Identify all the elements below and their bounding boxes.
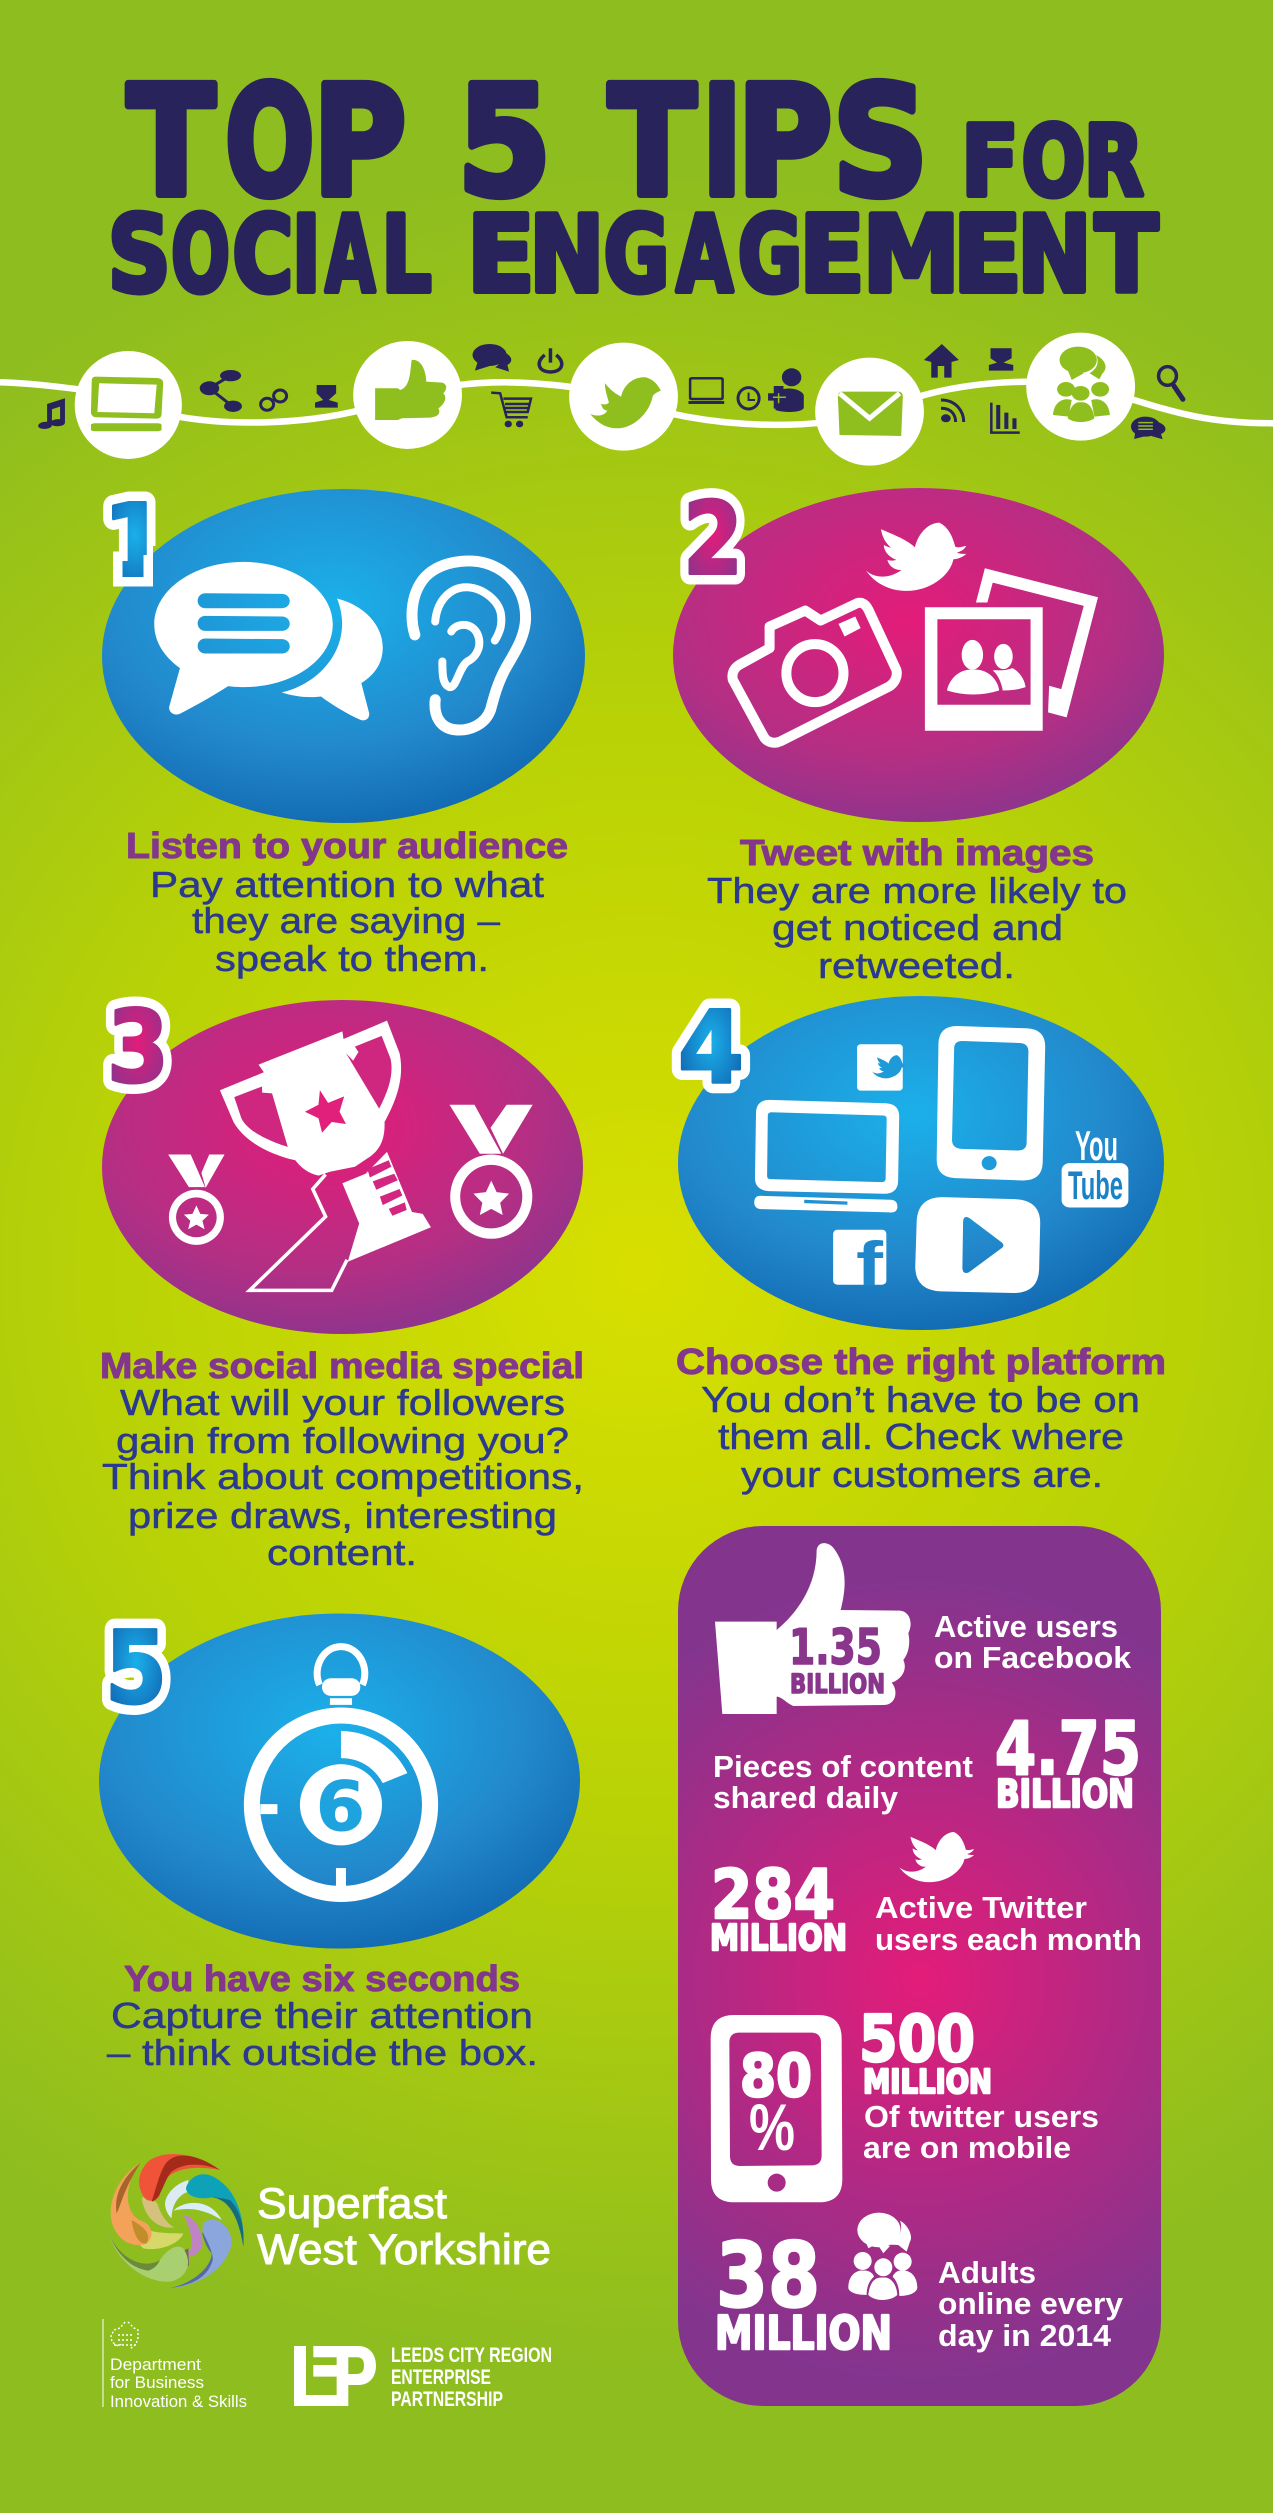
blue oval bbox=[678, 996, 1164, 1330]
title line two: M bbox=[862, 193, 960, 316]
panel: tip 1 bbox=[102, 482, 585, 979]
heading: You have six seconds bbox=[124, 1958, 520, 1999]
label: content shared: Pieces of content bbox=[713, 1749, 973, 1784]
title word: for: O bbox=[1022, 105, 1085, 218]
department name: Department bbox=[110, 2355, 201, 2374]
number 5: 5 bbox=[105, 1610, 167, 1726]
icon: rss bbox=[941, 400, 964, 422]
icon: mini laptop bbox=[688, 378, 724, 404]
title word: for: F bbox=[961, 105, 1019, 218]
body text bbox=[150, 864, 544, 979]
number 2: 2 bbox=[683, 480, 743, 598]
label: adults online: day in 2014 bbox=[938, 2318, 1112, 2353]
icon band with wavy line bbox=[0, 333, 1273, 466]
icon: bird circle bbox=[569, 343, 678, 451]
body text bbox=[701, 1379, 1140, 1495]
stat: 284 million: 284 bbox=[711, 1856, 835, 1935]
panel background bbox=[678, 1526, 1161, 2406]
stat: 4.75 billion bbox=[995, 1707, 1141, 1816]
stat: 38 million: 38 bbox=[716, 2223, 820, 2327]
body text: them all. Check where bbox=[718, 1416, 1124, 1457]
icon: play button bbox=[915, 1197, 1040, 1293]
title line two: N bbox=[529, 193, 604, 316]
label: adults online bbox=[938, 2255, 1124, 2353]
icon: trophy bbox=[220, 1021, 431, 1290]
icon: tablet bbox=[937, 1026, 1045, 1180]
stat: 38 million: MILLION bbox=[715, 2306, 892, 2360]
stat: 500 million: 500 bbox=[859, 2003, 975, 2077]
stat: 80 percent: 80 bbox=[740, 2041, 812, 2110]
wordmark: West Yorkshire bbox=[257, 2226, 551, 2274]
body text bbox=[102, 1382, 584, 1573]
title line one: O bbox=[225, 54, 314, 230]
icon: people circle bbox=[1026, 333, 1135, 441]
stat: 1.35 billion: 1.35 bbox=[789, 1619, 882, 1676]
number 1 bbox=[103, 492, 156, 586]
title line one: S bbox=[833, 54, 928, 230]
icon: colour swirl bbox=[109, 2154, 244, 2288]
panel: statistics bbox=[678, 1526, 1161, 2406]
label: adults online: online every bbox=[938, 2286, 1124, 2321]
title bbox=[108, 54, 1158, 316]
title line two: T bbox=[1095, 193, 1158, 316]
body text: Think about competitions, bbox=[102, 1456, 584, 1497]
title line two: E bbox=[467, 193, 535, 316]
panel: tip 4 bbox=[676, 990, 1166, 1495]
icon: ear bbox=[412, 561, 526, 730]
title line one: P bbox=[737, 54, 832, 230]
youtube wordmark bbox=[1068, 1122, 1123, 1208]
title line two: I bbox=[292, 193, 321, 316]
body text: content. bbox=[267, 1532, 417, 1573]
icon: magnifier bbox=[1159, 367, 1183, 399]
stat: 38 million bbox=[715, 2223, 892, 2360]
lep name: PARTNERSHIP bbox=[391, 2388, 503, 2411]
label: mobile users: are on mobile bbox=[863, 2130, 1071, 2165]
wordmark bbox=[257, 2180, 551, 2274]
pink oval bbox=[102, 1000, 583, 1334]
heading: Listen to your audience bbox=[126, 825, 568, 866]
icon: clock bbox=[738, 388, 759, 409]
icon: youtube box bbox=[1062, 1163, 1128, 1207]
title line two: E bbox=[953, 193, 1022, 316]
department name: Innovation & Skills bbox=[110, 2392, 247, 2411]
logo: superfast west yorkshire bbox=[109, 2154, 551, 2288]
label: twitter users: Active Twitter bbox=[875, 1890, 1087, 1925]
label: facebook users: on Facebook bbox=[934, 1640, 1132, 1675]
icon: polaroid photos bbox=[925, 568, 1098, 731]
icon: camera bbox=[732, 603, 897, 743]
icon: small medal bbox=[168, 1155, 225, 1245]
icon: stamp bbox=[315, 385, 338, 408]
youtube wordmark: Tube bbox=[1068, 1164, 1123, 1208]
icon: power bbox=[539, 348, 562, 372]
label: facebook users: Active users bbox=[934, 1609, 1118, 1644]
panel: tip 2 bbox=[673, 480, 1164, 986]
icon: laptop circle bbox=[75, 351, 182, 459]
body text: your customers are. bbox=[741, 1454, 1103, 1495]
blue oval bbox=[99, 1614, 580, 1948]
title line two: E bbox=[799, 193, 865, 316]
body text: retweeted. bbox=[818, 945, 1015, 986]
stat: 500 million: MILLION bbox=[863, 2062, 992, 2101]
icon: facebook square bbox=[833, 1230, 886, 1285]
number 4: 4 bbox=[678, 990, 744, 1106]
icon: stamp two bbox=[989, 348, 1013, 371]
number 5: 5 bbox=[105, 1610, 167, 1726]
icon: phone bbox=[711, 2015, 842, 2202]
logo: leeds city region lep bbox=[294, 2344, 552, 2411]
panel: tip 5 bbox=[99, 1610, 580, 2073]
pink oval bbox=[673, 488, 1164, 822]
number 2: 2 bbox=[683, 480, 743, 598]
label: mobile users bbox=[863, 2099, 1099, 2165]
number 1: 1 bbox=[103, 482, 167, 600]
icon: music bbox=[38, 398, 65, 429]
stat: 80 percent bbox=[740, 2041, 812, 2164]
body text: gain from following you? bbox=[116, 1420, 569, 1461]
title line two: N bbox=[1017, 193, 1092, 316]
number 3: 3 bbox=[107, 988, 169, 1106]
title word: for: R bbox=[1084, 105, 1144, 218]
body text: What will your followers bbox=[120, 1382, 565, 1423]
number 1: 1 bbox=[103, 482, 167, 600]
divider and crest bbox=[102, 2319, 138, 2407]
icon: link bbox=[261, 390, 287, 410]
label: twitter users bbox=[875, 1890, 1142, 1957]
title line two: G bbox=[738, 193, 802, 316]
icon: large medal bbox=[449, 1105, 533, 1239]
icon: people with speech bubbles bbox=[848, 2213, 917, 2300]
icon: home bbox=[924, 344, 959, 378]
body text: You don’t have to be on bbox=[701, 1379, 1140, 1420]
heading: Make social media special bbox=[100, 1345, 584, 1386]
icon: speech bubbles bbox=[154, 562, 383, 720]
title line two: G bbox=[604, 193, 670, 316]
label: facebook users bbox=[934, 1609, 1132, 1675]
label: content shared: shared daily bbox=[713, 1780, 899, 1815]
number 3: 3 bbox=[107, 988, 169, 1106]
lep name: ENTERPRISE bbox=[391, 2366, 491, 2389]
icon: thumbs up bbox=[715, 1543, 911, 1714]
body text: speak to them. bbox=[215, 938, 489, 979]
department name bbox=[110, 2355, 247, 2411]
icon: bar chart bbox=[991, 403, 1020, 433]
stat: 80 percent: % bbox=[749, 2090, 795, 2164]
label: mobile users: Of twitter users bbox=[864, 2099, 1099, 2134]
stat: 4.75 billion: 4.75 bbox=[995, 1707, 1141, 1792]
label: content shared bbox=[713, 1749, 973, 1815]
heading: Tweet with images bbox=[740, 832, 1094, 873]
department name: for Business bbox=[110, 2373, 204, 2392]
body text: they are saying – bbox=[192, 900, 500, 941]
title line two: O bbox=[171, 193, 230, 316]
logo: department for business bbox=[102, 2319, 247, 2411]
icon: thumb circle bbox=[353, 341, 462, 449]
icon: twitter bird bbox=[866, 523, 966, 591]
icon: twitter bird bbox=[899, 1832, 974, 1882]
icon: mail circle bbox=[815, 358, 924, 466]
lep name: LEEDS CITY REGION bbox=[391, 2344, 552, 2367]
title line one: I bbox=[702, 54, 742, 230]
icon: person plus bbox=[768, 368, 804, 412]
icon: stopwatch bbox=[244, 1647, 438, 1902]
wavy line bbox=[0, 382, 1273, 425]
stopwatch number six: 6 bbox=[316, 1768, 365, 1847]
lep name bbox=[391, 2344, 552, 2411]
panel: tip 3 bbox=[100, 988, 584, 1573]
title line two: L bbox=[381, 193, 432, 316]
body text: – think outside the box. bbox=[107, 2032, 538, 2073]
body text bbox=[107, 1995, 538, 2073]
title line two: A bbox=[676, 193, 733, 316]
stat: 4.75 billion: BILLION bbox=[996, 1772, 1134, 1816]
wordmark: Superfast bbox=[257, 2180, 447, 2228]
small navy icons bbox=[38, 344, 1183, 439]
heading: Choose the right platform bbox=[676, 1341, 1166, 1382]
icon: cart bbox=[491, 393, 531, 427]
icon: share bbox=[200, 370, 242, 412]
body text bbox=[707, 870, 1127, 986]
title line two: A bbox=[325, 193, 375, 316]
title line one: 5 bbox=[458, 54, 551, 230]
title line two: C bbox=[232, 193, 293, 316]
icon: chat bubble bbox=[1131, 417, 1165, 439]
icon: laptop bbox=[754, 1100, 899, 1212]
title line two: S bbox=[108, 193, 171, 316]
icon: speech bubbles bbox=[473, 344, 511, 372]
number 4: 4 bbox=[678, 990, 744, 1106]
body text: Pay attention to what bbox=[150, 864, 544, 905]
title line one: P bbox=[313, 54, 406, 230]
title line one: T bbox=[127, 54, 215, 230]
body text: get noticed and bbox=[772, 907, 1063, 948]
youtube wordmark: You bbox=[1075, 1122, 1118, 1169]
lep mark bbox=[294, 2346, 376, 2406]
label: adults online: Adults bbox=[938, 2255, 1036, 2290]
body text: prize draws, interesting bbox=[128, 1495, 557, 1536]
stat: 1.35 billion bbox=[789, 1619, 885, 1700]
icon: twitter square bbox=[857, 1044, 906, 1091]
label: twitter users: users each month bbox=[875, 1922, 1142, 1957]
body text: They are more likely to bbox=[707, 870, 1127, 911]
body text: Capture their attention bbox=[111, 1995, 533, 2036]
title line one: T bbox=[609, 54, 696, 230]
blue oval bbox=[102, 489, 585, 823]
stat: 284 million: MILLION bbox=[710, 1918, 847, 1959]
facebook letter: f bbox=[856, 1230, 883, 1299]
stat: 1.35 billion: BILLION bbox=[790, 1669, 885, 1700]
